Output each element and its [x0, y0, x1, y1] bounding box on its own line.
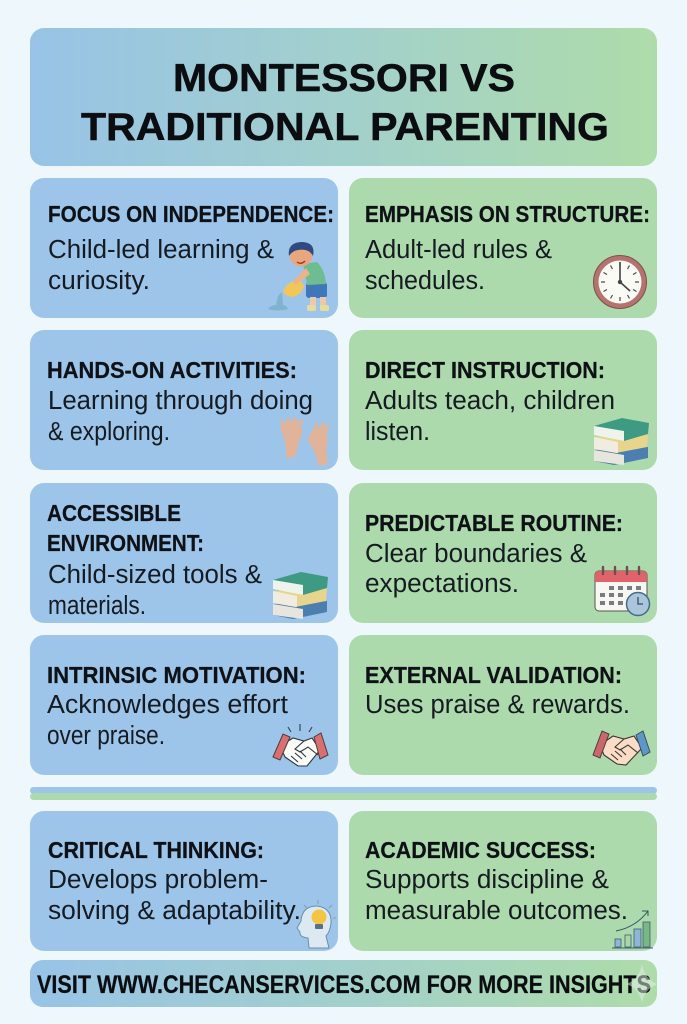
icon: child pouring water	[268, 242, 329, 311]
panel: intrinsic motivation	[30, 635, 338, 775]
panel: critical thinking: solving & adaptability.	[48, 897, 301, 925]
panel: accessible environment: Child-sized tools &	[48, 561, 262, 589]
panel: accessible environment	[30, 483, 338, 623]
icon: growth bar chart	[612, 911, 653, 948]
panel: hands-on activities: HANDS-ON ACTIVITIES:	[47, 357, 297, 383]
panel: predictable routine: Clear boundaries &	[365, 540, 587, 568]
icon: handshake	[593, 731, 650, 765]
panel: academic success: measurable outcomes.	[365, 897, 628, 925]
icon: stack of books	[273, 572, 328, 619]
panel: academic success: Supports discipline &	[365, 866, 609, 894]
icon: wall clock	[594, 256, 646, 308]
icon: stack of books	[594, 418, 649, 465]
panel: focus on independence: FOCUS ON INDEPENDENCE:	[48, 201, 334, 227]
panel: emphasis on structure	[349, 178, 657, 318]
panel: direct instruction: listen.	[365, 418, 430, 446]
panel: accessible environment: ACCESSIBLE	[47, 500, 181, 526]
divider	[30, 787, 657, 800]
panel: hands-on activities	[30, 330, 338, 470]
panel: intrinsic motivation: over praise.	[47, 722, 165, 750]
panel: predictable routine: expectations.	[365, 570, 519, 598]
panel: emphasis on structure: EMPHASIS ON STRUCTURE:	[365, 201, 650, 227]
panel: intrinsic motivation: INTRINSIC MOTIVATION:	[47, 662, 306, 688]
panel: emphasis on structure: Adult-led rules &	[365, 236, 552, 264]
panel: critical thinking: Develops problem-	[48, 866, 268, 894]
panel: external validation	[349, 635, 657, 775]
icon: open hands	[281, 418, 328, 465]
panel: academic success: ACADEMIC SUCCESS:	[365, 837, 596, 863]
panel: direct instruction: DIRECT INSTRUCTION:	[365, 357, 605, 383]
panel: predictable routine	[349, 483, 657, 623]
panel: focus on independence: Child-led learning &	[48, 236, 274, 264]
icon: head with light bulb	[297, 900, 336, 948]
icon: calendar with clock	[595, 567, 650, 616]
panel: external validation: Uses praise & rewards.	[365, 691, 630, 719]
panel: focus on independence: curiosity.	[48, 267, 150, 295]
title banner	[30, 28, 657, 166]
panel: hands-on activities: & exploring.	[48, 418, 170, 446]
panel: accessible environment: materials.	[48, 592, 146, 620]
panel: hands-on activities: Learning through doing	[48, 387, 313, 415]
panel: predictable routine: PREDICTABLE ROUTINE:	[365, 510, 623, 536]
panel: external validation: EXTERNAL VALIDATION:	[365, 662, 622, 688]
panel: focus on independence	[30, 178, 338, 318]
panel: emphasis on structure: schedules.	[365, 267, 485, 295]
footer banner	[30, 960, 658, 1007]
panel: accessible environment: ENVIRONMENT:	[47, 530, 204, 556]
panel: intrinsic motivation: Acknowledges effort	[47, 691, 288, 719]
panel: academic success	[349, 811, 657, 951]
icon: handshake with sparks	[273, 724, 328, 766]
title banner: TRADITIONAL PARENTING	[81, 106, 609, 149]
panel: critical thinking: CRITICAL THINKING:	[48, 837, 264, 863]
title banner: MONTESSORI VS	[173, 57, 515, 100]
icon: sparkle	[626, 964, 658, 1003]
panel: critical thinking	[30, 811, 338, 951]
panel: direct instruction: Adults teach, children	[365, 387, 615, 415]
panel: direct instruction	[349, 330, 657, 470]
